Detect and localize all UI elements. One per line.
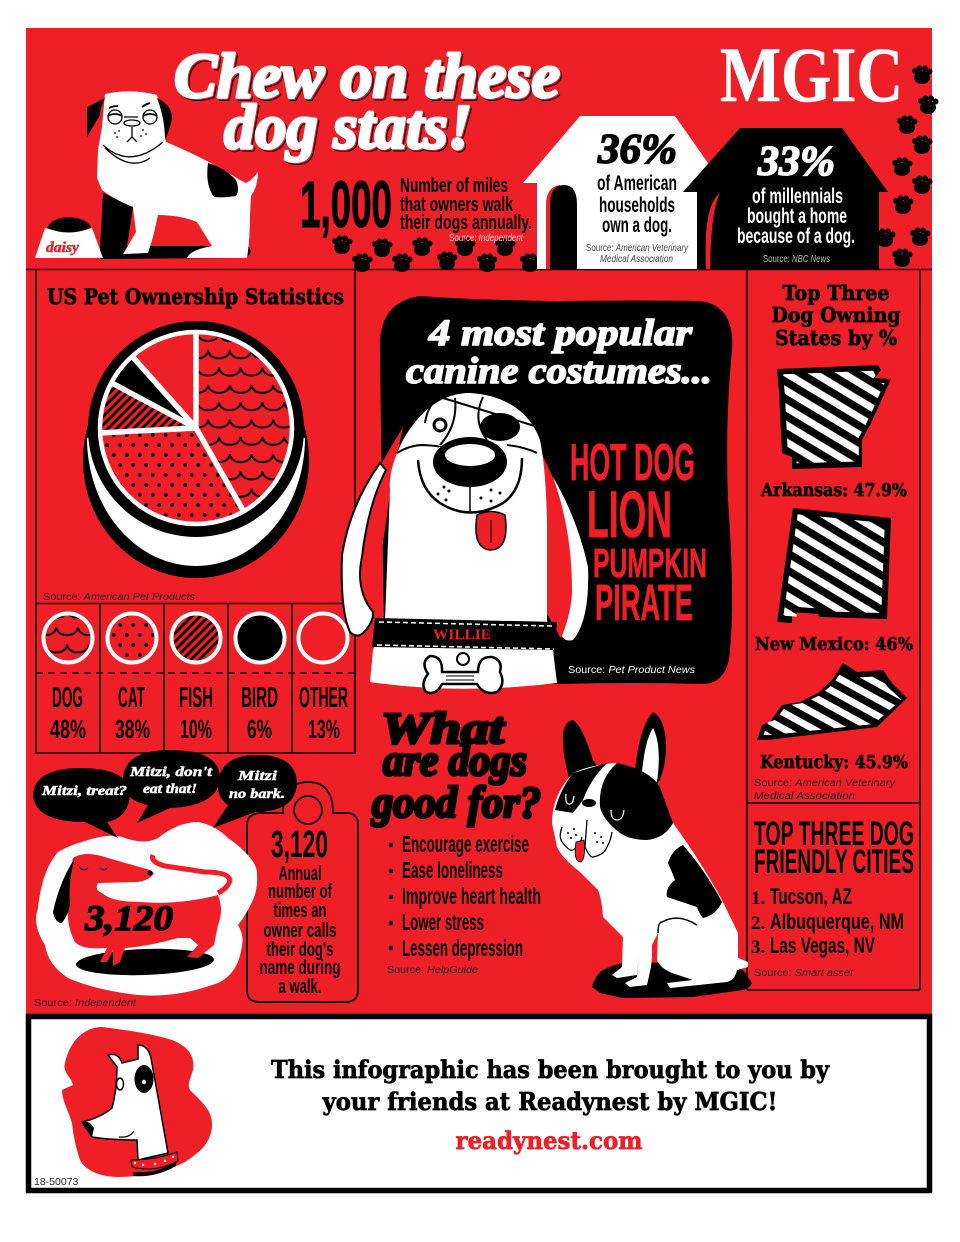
heading (406, 313, 712, 392)
speech bubbles: Mitzi (237, 769, 277, 784)
illustration: pug and food bowl: daisy (46, 240, 79, 256)
illustration: dog with collar on red blob (62, 1027, 212, 1177)
heading: What (381, 704, 506, 753)
legend: bird: BIRD (241, 682, 278, 714)
panel: top three dog owning states (754, 281, 913, 802)
stat: 1,000 miles: 1,000 (300, 167, 392, 241)
city list: Albuquerque, NM (770, 909, 904, 934)
panel: what are dogs good for (371, 704, 541, 976)
source: Source: Smart asset (754, 967, 854, 979)
heading (772, 281, 900, 350)
heading: canine costumes... (406, 351, 712, 392)
heading (371, 704, 541, 827)
black dog house: 33% (683, 128, 888, 269)
heading: 4 most popular (428, 313, 693, 354)
legend: other (298, 614, 348, 744)
heading: US Pet Ownership Statistics (47, 285, 344, 310)
source: Medical Association (754, 790, 855, 802)
legend: other: 13% (308, 714, 340, 744)
dog tag: 3,120 (247, 782, 358, 1002)
red background panel (26, 28, 932, 1018)
speech bubbles: Mitzi, don't (129, 765, 213, 780)
sponsor message: your friends at Readynest by MGIC! (322, 1087, 778, 1116)
source: Source: Pet Product News (568, 664, 696, 676)
black dog house: 33%: 33% (757, 139, 835, 185)
white dog house: 36%: households (599, 194, 675, 217)
illustration: dachshund Mitzi on white blob: 3,120 (84, 898, 173, 938)
costume list (570, 434, 707, 631)
speech bubbles: eat that! (143, 782, 197, 797)
dog tag: 3,120: Annual (278, 863, 322, 885)
bullet list: Improve heart health (402, 883, 541, 909)
source: Source: American Pet Products (43, 591, 196, 603)
dog tag: 3,120: a walk. (278, 976, 322, 998)
white dog house: 36% (523, 116, 708, 269)
black dog house: 33%: bought a home (747, 205, 847, 228)
legend: fish (172, 614, 220, 744)
bullet list: Encourage exercise (402, 831, 529, 857)
source: independent: Source: Independent (449, 232, 524, 244)
dog tag: 3,120: 3,120 (271, 824, 328, 866)
black dog house: 33%: because of a dog. (737, 225, 855, 248)
legend: fish: 10% (180, 714, 212, 744)
source (754, 777, 896, 802)
illustration: pirate dog Willie (342, 393, 588, 693)
city list: 3. (751, 937, 765, 958)
MGIC logo: MGIC (720, 31, 903, 118)
dog tag: 3,120: times an (274, 900, 326, 922)
map: Kentucky (757, 663, 907, 740)
white dog house: 36%: 36% (597, 127, 677, 173)
legend: cat (108, 614, 156, 744)
white dog house: 36%: own a dog. (602, 214, 672, 237)
heading: Top Three (782, 281, 890, 305)
panel: top three dog friendly cities (751, 815, 914, 979)
costume list: LION (587, 477, 672, 551)
pie chart in dog bowl (83, 321, 309, 578)
legend: fish: FISH (179, 682, 213, 714)
city list: 2. (751, 913, 765, 934)
city list: Tucson, AZ (770, 884, 852, 909)
panel: US pet ownership statistics (43, 285, 348, 744)
costume list: PUMPKIN (593, 540, 707, 586)
stat: 1,000 miles: Number of miles (400, 175, 508, 197)
label: Kentucky: Kentucky: 45.9% (760, 753, 908, 773)
source: Source: American Veterinary (754, 777, 896, 789)
black dog house: 33%: Source: NBC News (763, 253, 831, 265)
dog tag: 3,120: their dog's (266, 939, 334, 961)
heading: States by % (775, 326, 897, 350)
city list (751, 884, 904, 958)
heading (754, 815, 914, 881)
stat: 1,000 miles: their dogs annually. (400, 212, 532, 234)
text: OTHER (299, 682, 348, 714)
white dog house: 36%: Medical Association (600, 253, 673, 265)
legend: cat: 38% (115, 714, 150, 744)
legend: bird: 6% (247, 714, 272, 744)
title: dog stats! (224, 91, 472, 162)
speech bubbles (33, 750, 297, 838)
panel: sponsor footer (28, 1016, 930, 1190)
legend: cat: CAT (118, 682, 145, 714)
title (174, 40, 560, 162)
heading: are dogs (383, 736, 527, 785)
title: Chew on these (174, 40, 560, 111)
bullet list (402, 831, 541, 961)
speech bubbles: Mitzi, treat? (41, 784, 127, 799)
label: Arkansas: Arkansas: 47.9% (760, 481, 907, 501)
city list: 1. (751, 888, 765, 909)
document code: 18-50073 (34, 1176, 79, 1188)
costume list: PIRATE (595, 574, 693, 631)
paw print trail (332, 66, 938, 272)
illustration: pug and food bowl (35, 91, 258, 259)
dog tag: 3,120: number of (268, 881, 332, 903)
map: Arkansas (777, 365, 891, 469)
white dog house: 36%: Source: American Veterinary (586, 242, 689, 254)
dog tag: 3,120: owner calls (264, 920, 336, 942)
map: New Mexico (777, 508, 891, 623)
stat: 1,000 miles: that owners walk (400, 194, 514, 216)
label: New Mexico: New Mexico: 46% (755, 635, 913, 655)
legend: dog: DOG (52, 682, 83, 714)
speech bubbles: no bark. (229, 787, 285, 802)
illustration: french bulldog (552, 712, 752, 998)
source: Source: HelpGuide (387, 964, 478, 976)
sponsor message (271, 1055, 830, 1116)
bullet list: Ease loneliness (402, 857, 503, 883)
legend: dog (44, 614, 92, 744)
bullet list: Lessen depression (402, 935, 523, 961)
bullet list: Lower stress (402, 909, 484, 935)
heading: Dog Owning (772, 303, 900, 327)
city list: Las Vegas, NV (770, 933, 875, 958)
sponsor message: This infographic has been brought to you by (271, 1055, 830, 1084)
heading: good for? (371, 778, 541, 827)
illustration: pirate dog Willie: WILLIE (433, 627, 491, 643)
dog tag: 3,120: name during (260, 957, 340, 979)
legend: bird (236, 614, 284, 744)
website url: readynest.com (456, 1126, 643, 1155)
source: independent: Source: Independent (34, 997, 137, 1009)
legend: dog: 48% (50, 714, 86, 744)
panel: canine costumes (342, 296, 732, 693)
illustration: dachshund Mitzi on white blob (36, 822, 257, 996)
costume list: HOT DOG (570, 434, 695, 492)
white dog house: 36%: of American (597, 172, 677, 195)
black dog house: 33%: of millennials (752, 185, 843, 208)
